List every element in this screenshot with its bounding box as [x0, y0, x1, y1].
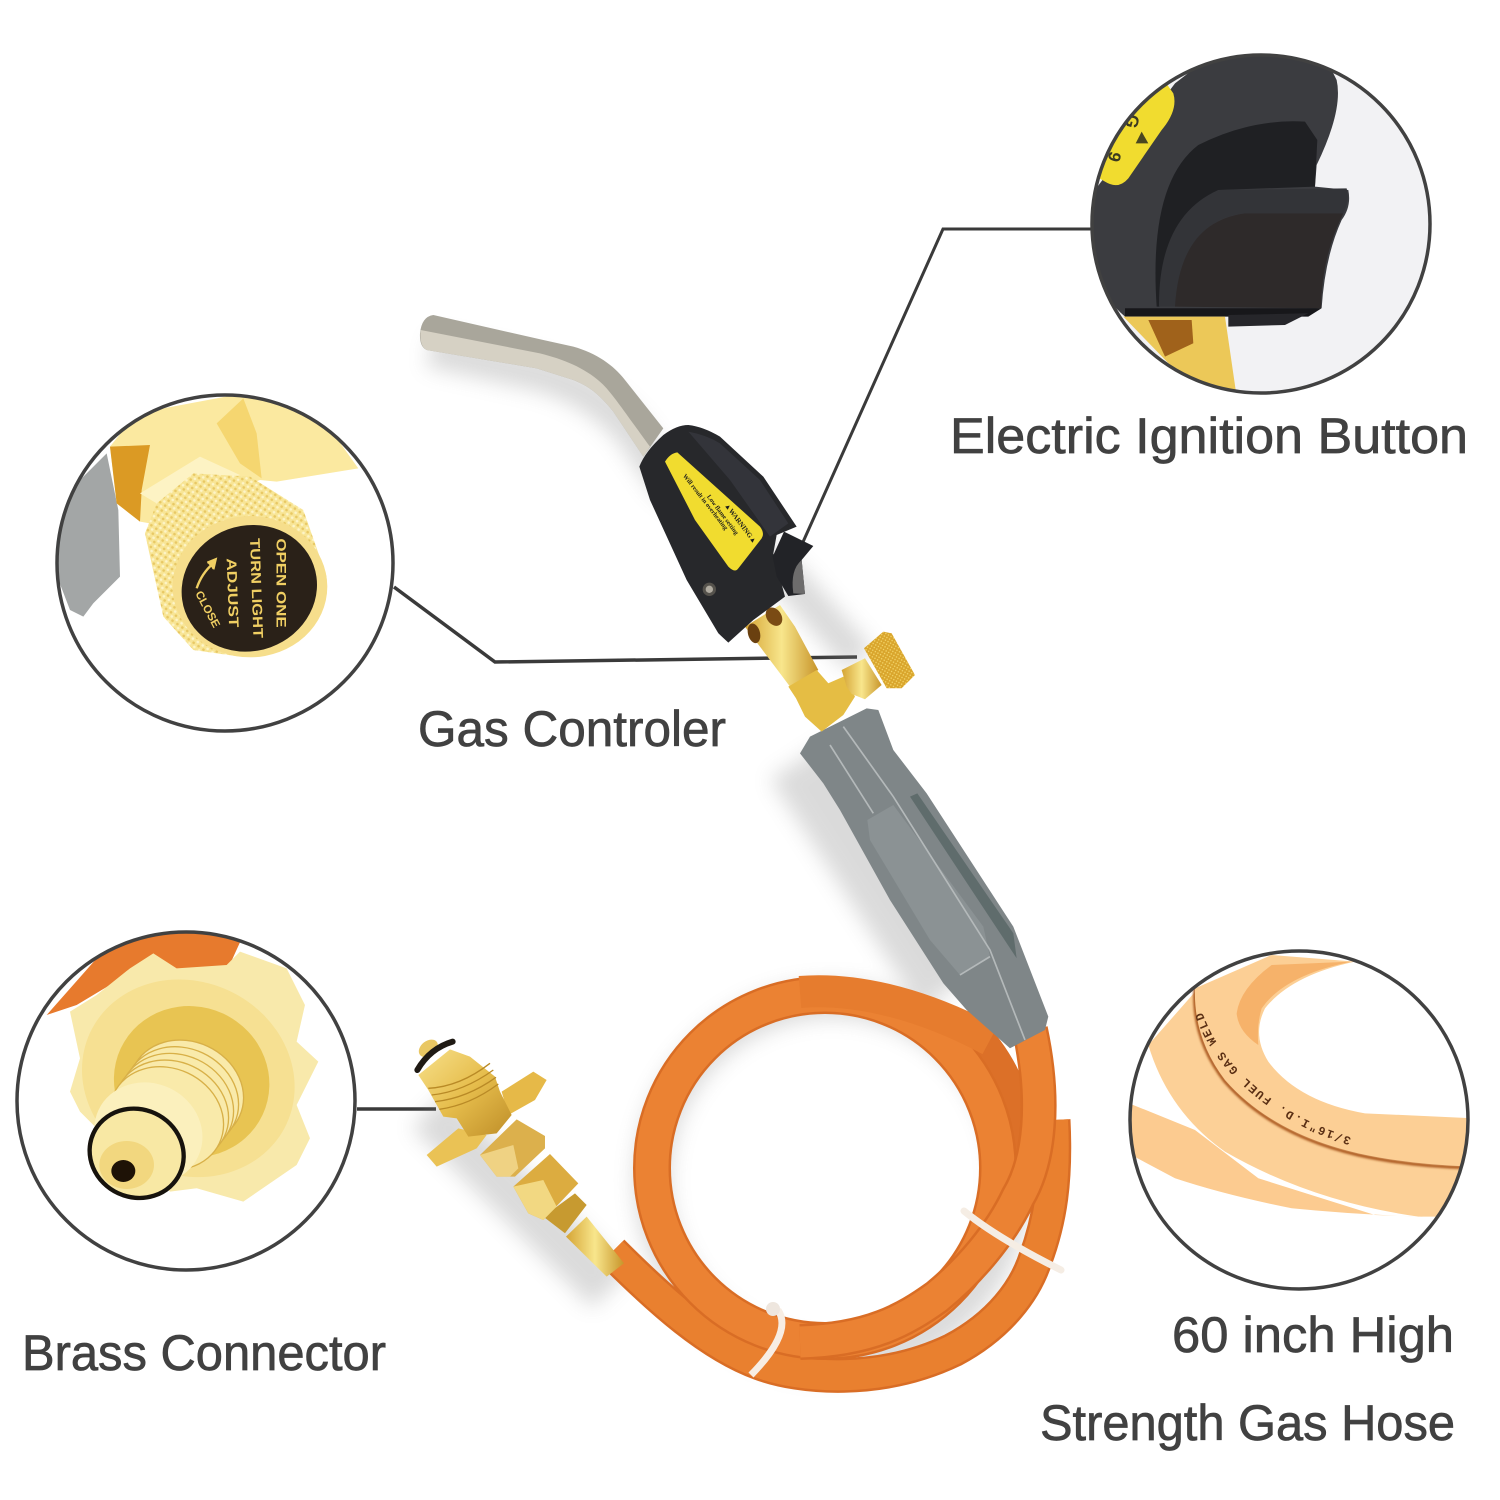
button cap — [1175, 213, 1343, 308]
brass below — [1123, 317, 1237, 397]
dial text: TURN LIGHT — [247, 538, 266, 639]
lower strand — [1125, 1102, 1425, 1217]
brass sleeve — [566, 1217, 624, 1277]
dark contact line — [1195, 988, 1468, 1168]
front hex nut — [480, 1119, 545, 1177]
knurled gas valve — [842, 632, 915, 699]
o-ring — [417, 1042, 453, 1070]
brass elbow — [110, 393, 358, 523]
hose print: 3/16"I.D. FUEL GAS WELD — [1196, 1014, 1350, 1144]
leader line: gas controller — [394, 587, 857, 662]
middle strand — [1148, 990, 1475, 1217]
zip tie: right — [964, 1211, 1061, 1270]
dial text — [192, 538, 290, 639]
zip tie: bottom — [751, 1302, 782, 1375]
housing — [1085, 50, 1349, 317]
yellow label: 9 — [1104, 150, 1125, 164]
o-ring — [87, 1106, 186, 1200]
leader line: electric ignition button — [803, 229, 1093, 542]
housing highlight — [688, 432, 788, 537]
black housing — [639, 425, 797, 643]
soft product shadow — [430, 350, 1012, 1360]
dial text: ADJUST — [224, 558, 242, 628]
grip slot — [910, 793, 1017, 958]
grey grip — [53, 453, 120, 617]
torch head, zoom coordinates — [639, 425, 915, 732]
brass connector, zoom coordinates — [415, 1036, 624, 1277]
dial arrow — [197, 559, 216, 588]
top strand — [1195, 955, 1475, 1167]
yellow label — [1100, 85, 1174, 186]
ignition button — [773, 532, 813, 596]
label: hose line 1: 60 inch High — [1172, 1307, 1454, 1363]
strand from connector — [612, 1120, 1054, 1375]
yellow warning label: Low flame setting — [705, 494, 740, 537]
threaded body — [415, 1036, 512, 1137]
leader line: brass connector — [357, 1107, 436, 1111]
dial text: CLOSE — [192, 589, 222, 630]
button flange — [1159, 188, 1348, 307]
hole — [111, 1160, 135, 1182]
callout circle: electric ignition button — [1085, 50, 1435, 400]
knob rim — [173, 516, 327, 657]
yellow warning label: Will result in overheating — [681, 473, 730, 532]
back strand shading — [1237, 962, 1352, 1045]
callout circle: gas hose — [1128, 949, 1470, 1291]
collar — [543, 1193, 587, 1233]
knurled knob — [145, 473, 327, 657]
label: hose line 2: Strength Gas Hose — [1040, 1395, 1455, 1451]
moulding lines — [830, 727, 1025, 1040]
steel tube, zoom coordinates — [420, 315, 663, 457]
grip panel — [867, 805, 990, 975]
button neck recess — [1155, 121, 1317, 307]
threads — [114, 1040, 244, 1168]
product: torch with hose — [415, 315, 1061, 1375]
main ring — [652, 995, 998, 1341]
strand from handle, right — [800, 1030, 1039, 1342]
grey rubber handle, zoom coordinates — [800, 708, 1048, 1048]
dial text: OPEN ONE — [274, 538, 290, 628]
yellow label: G — [1121, 112, 1144, 130]
callout circle: gas controller — [53, 393, 393, 731]
gear lobes — [70, 952, 318, 1202]
orange hose — [47, 932, 243, 1015]
rear hex nut — [513, 1154, 578, 1220]
inner ring shading — [114, 1006, 270, 1156]
base plate — [1125, 308, 1322, 317]
strand up to the handle, top — [800, 991, 990, 1040]
label: brass connector: Brass Connector — [22, 1325, 386, 1381]
black dial — [182, 525, 317, 652]
callout circle: brass connector — [17, 932, 355, 1270]
tip — [99, 1141, 154, 1189]
label: electric ignition button: Electric Ignition Button — [950, 408, 1468, 464]
yellow warning label — [665, 452, 763, 570]
flange wings — [427, 1072, 547, 1167]
label: gas controller: Gas Controler — [418, 701, 726, 757]
tube highlight — [420, 330, 650, 457]
screw — [703, 583, 716, 596]
yellow warning label: ▲WARNING▲ — [723, 502, 758, 545]
dark back strand — [960, 1020, 1022, 1175]
brass neck and elbow — [745, 604, 855, 732]
flange ring — [82, 980, 294, 1177]
hose coil — [612, 991, 1061, 1375]
nose collar — [94, 1082, 202, 1176]
